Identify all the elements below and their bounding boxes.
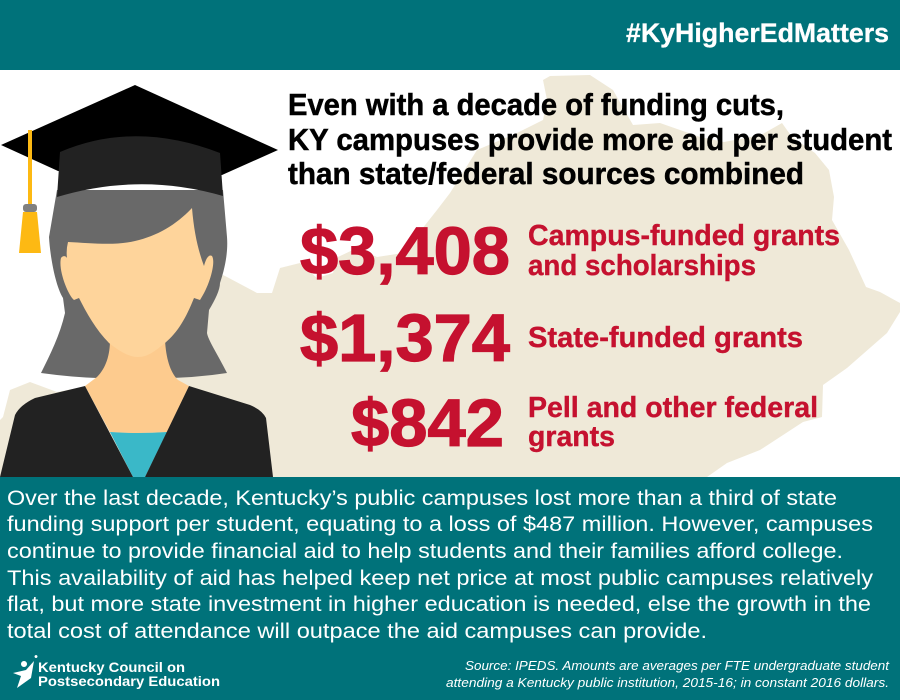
source note <box>446 658 890 690</box>
shirt <box>110 432 167 477</box>
stat: federal <box>351 386 818 461</box>
stat: state-funded: $1,374 <box>300 301 510 376</box>
headline: KY campuses provide more aid per student <box>288 123 892 157</box>
headline <box>288 88 892 191</box>
body text: Over the last decade, Kentucky’s public campuses lost more than a third of state <box>7 486 837 510</box>
body text: total cost of attendance will outpace the aid campuses can provide. <box>7 619 707 643</box>
stat: campus-funded: and scholarships <box>528 250 756 282</box>
source note: Source: IPEDS. Amounts are averages per FTE undergraduate student <box>465 658 890 673</box>
headline: than state/federal sources combined <box>288 157 804 191</box>
logo <box>13 655 220 689</box>
stat: campus-funded <box>300 214 840 289</box>
body text <box>7 486 873 643</box>
source note: attending a Kentucky public institution, 2015-16; in constant 2016 dollars. <box>446 675 889 690</box>
cap board <box>1 85 278 175</box>
icon: reaching figure <box>13 655 38 688</box>
gown <box>0 386 273 477</box>
stat: federal: Pell and other federal <box>528 392 818 424</box>
stat: federal: $842 <box>351 386 504 461</box>
stat: state-funded <box>300 301 803 376</box>
stat: state-funded: State-funded grants <box>528 322 803 354</box>
stat: federal: grants <box>528 421 615 453</box>
body text: This availability of aid has helped keep net price at most public campuses relatively <box>7 566 873 590</box>
map of Kentucky background <box>0 75 900 477</box>
logo: Postsecondary Education <box>38 674 220 689</box>
logo text: Kentucky Council on <box>38 660 185 675</box>
header band <box>0 0 900 70</box>
tassel <box>19 130 41 253</box>
hair <box>41 190 227 378</box>
cap band <box>57 136 223 197</box>
graduate illustration <box>0 85 278 477</box>
body text: funding support per student, equating to a loss of $487 million. However, campuses <box>7 512 873 536</box>
stat: campus-funded: Campus-funded grants <box>528 220 840 252</box>
face <box>60 208 213 357</box>
headline: Even with a decade of funding cuts, <box>288 88 784 122</box>
neck <box>85 340 189 433</box>
body text: continue to provide financial aid to help students and their families afford college. <box>7 539 843 563</box>
stat: campus-funded: $3,408 <box>300 214 510 289</box>
hashtag: #KyHigherEdMatters <box>626 18 889 48</box>
body text: flat, but more state investment in higher education is needed, else the growth in the <box>7 592 871 616</box>
footer panel <box>0 477 900 700</box>
